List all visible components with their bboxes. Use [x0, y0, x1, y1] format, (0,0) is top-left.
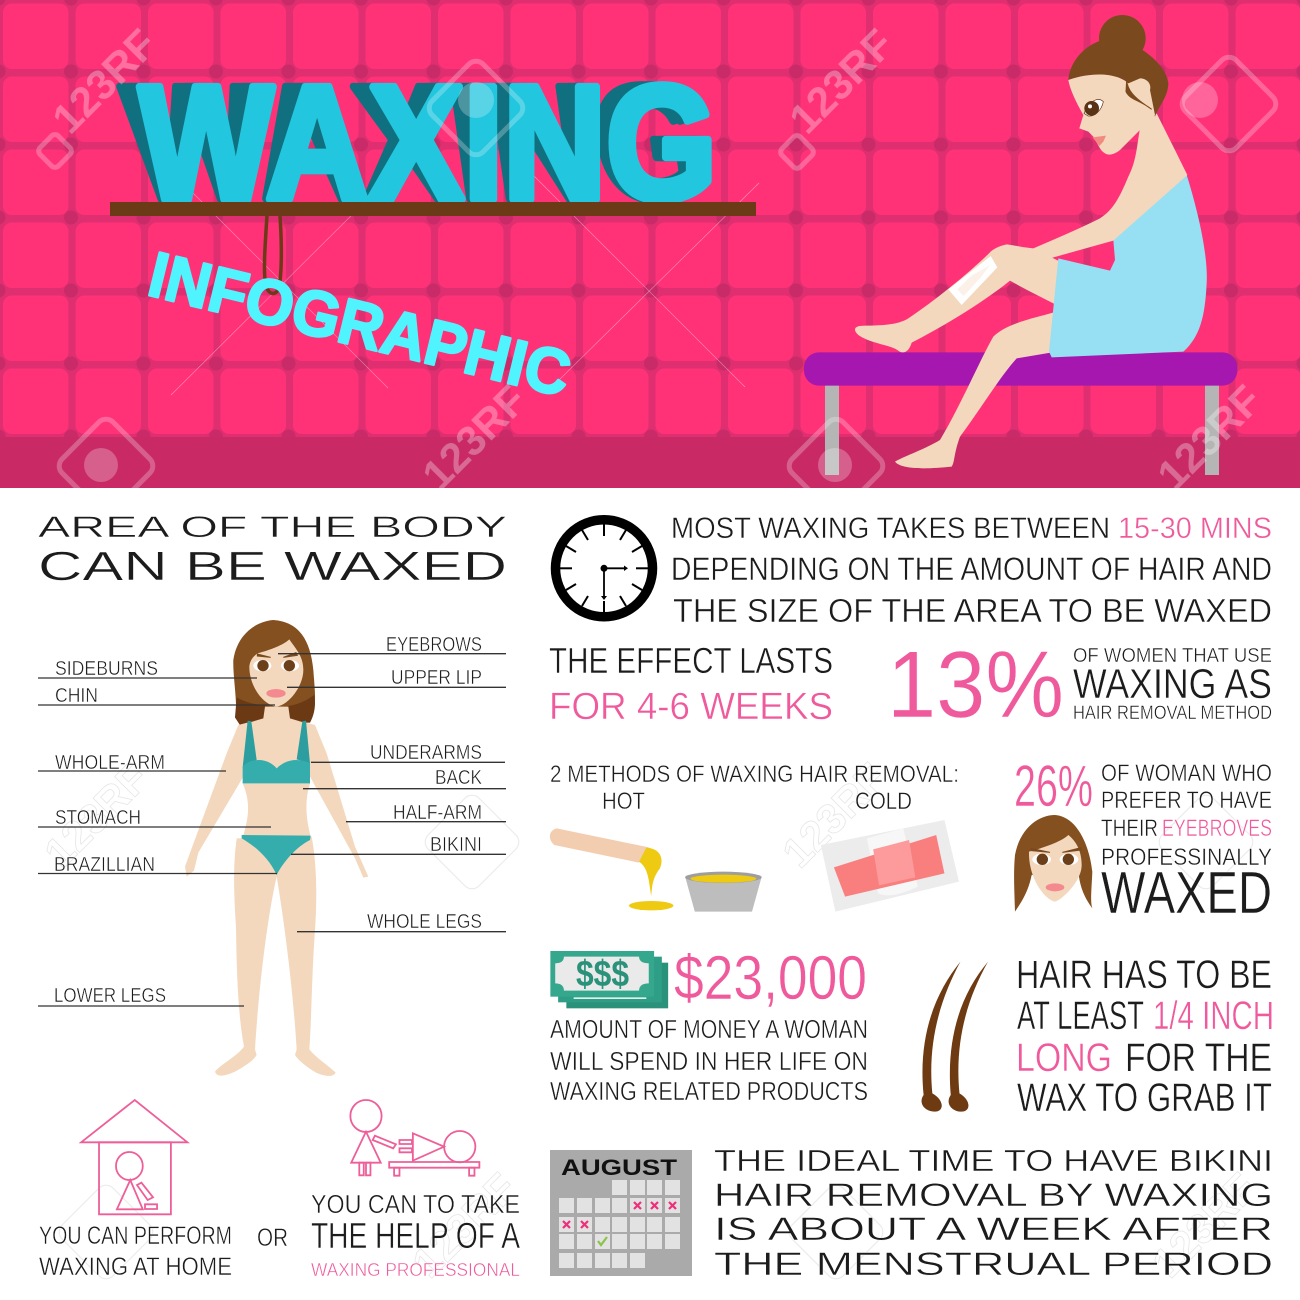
body part labels and leader lines: UPPER LIP	[391, 667, 482, 689]
body part labels and leader lines: EYEBROWS	[386, 634, 482, 656]
text: hair length	[1016, 953, 1274, 1120]
stock watermarks on hero: 123RF	[43, 20, 166, 142]
faint stock watermarks on white area: 123RF	[1143, 1164, 1266, 1286]
text: perform at home: YOU CAN PERFORM	[39, 1222, 232, 1250]
text: ideal time for bikini waxing: THE MENSTRUAL PERIOD	[714, 1246, 1273, 1282]
face	[249, 639, 303, 707]
stock watermarks on hero: 123RF	[780, 20, 903, 142]
towel	[1049, 175, 1207, 357]
subtitle: INFOGRAPHIC: INFOGRAPHIC	[142, 238, 578, 410]
text: two methods of waxing: 2 METHODS OF WAXING HAIR REMOVAL:	[550, 761, 959, 788]
stat: 26 percent eyebrows: OF WOMAN WHO	[1101, 760, 1272, 787]
text: take help of a professional: THE HELP OF A	[311, 1215, 520, 1256]
body part labels and leader lines: BACK	[435, 767, 483, 789]
text: take help of a professional: WAXING PROFESSIONAL	[311, 1260, 520, 1280]
text: duration of waxing: THE SIZE OF THE AREA TO BE WAXED	[673, 592, 1272, 629]
heading: area of the body	[38, 511, 507, 589]
stat: 13 percent	[887, 632, 1272, 738]
text: perform at home: WAXING AT HOME	[39, 1253, 232, 1281]
icon: August calendar	[550, 1150, 692, 1276]
arm, neck and shoulder	[1010, 113, 1187, 278]
lower leg resting on floor	[895, 312, 1057, 468]
icon: person waxing at home	[81, 1100, 187, 1214]
icon: waxing professional with client	[350, 1100, 479, 1176]
icon: cold wax strips	[821, 820, 959, 912]
bikini bottom	[242, 835, 311, 875]
body part labels and leader lines: WHOLE LEGS	[367, 911, 482, 933]
legs	[215, 837, 336, 1076]
text: two methods of waxing	[550, 761, 959, 815]
panel: pink tiled hero	[0, 0, 1300, 488]
raised leg with wax strip	[855, 244, 1063, 352]
stat: 26 percent eyebrows: PROFESSINALLY	[1101, 844, 1272, 871]
illustration: female body figure	[185, 620, 368, 1076]
body part labels and leader lines: WHOLE-ARM	[55, 752, 165, 774]
stock watermarks on hero	[37, 20, 1280, 517]
body part labels and leader lines: STOMACH	[55, 807, 141, 829]
icon: two hairs	[922, 962, 988, 1112]
faint stock watermarks on white area	[35, 754, 1266, 1286]
body part labels and leader lines: LOWER LEGS	[54, 985, 166, 1007]
text: or: OR	[257, 1224, 288, 1252]
bikini top	[243, 721, 310, 783]
icon: stack of dollar bills	[550, 951, 668, 1008]
stat: lifetime spending	[550, 944, 868, 1106]
stat: 26 percent eyebrows	[1014, 754, 1272, 926]
icon: clock	[556, 520, 652, 617]
text: effect lasts: FOR 4-6 WEEKS	[549, 686, 833, 728]
text: take help of a professional	[311, 1189, 520, 1280]
body part labels and leader lines: BRAZILLIAN	[54, 854, 155, 876]
stock watermarks on hero: 123RF	[413, 376, 536, 498]
lower hair shadow	[235, 695, 315, 725]
torso	[242, 707, 312, 840]
body part labels and leader lines: UNDERARMS	[370, 742, 482, 764]
icon: stack of dollar bills: $$$	[576, 953, 629, 994]
text: effect lasts	[549, 640, 833, 728]
text: effect lasts: THE EFFECT LASTS	[549, 640, 833, 681]
arms	[185, 723, 368, 878]
head with hair bun	[1068, 15, 1168, 155]
stat: lifetime spending: $23,000	[674, 944, 867, 1013]
bench	[804, 352, 1237, 475]
text: hair length: FOR THE	[1125, 1036, 1272, 1080]
stat: 26 percent eyebrows: THEIR	[1101, 815, 1158, 842]
icon: August calendar: AUGUST	[561, 1155, 678, 1180]
faint stock watermarks on white area: 123RF	[403, 1164, 526, 1286]
text: duration of waxing: 15-30 MINS	[1118, 512, 1272, 545]
text: duration of waxing	[671, 512, 1272, 629]
faint stock watermarks on white area: 123RF	[35, 754, 158, 876]
text: ideal time for bikini waxing: THE IDEAL TIME TO HAVE BIKINI	[714, 1143, 1273, 1178]
text: ideal time for bikini waxing: HAIR REMOVAL BY WAXING	[714, 1177, 1273, 1213]
illustration: woman waxing her leg on a bench	[804, 15, 1237, 475]
text: hair length: AT LEAST	[1017, 994, 1144, 1038]
text: two methods of waxing: COLD	[855, 788, 912, 815]
title: WAXING: WAXING	[139, 51, 717, 234]
body part labels and leader lines: BIKINI	[430, 834, 482, 856]
text: hair length: LONG	[1016, 1036, 1112, 1080]
stat: 13 percent: HAIR REMOVAL METHOD	[1073, 703, 1272, 724]
title: WAXING: WAXING	[115, 52, 718, 234]
stat: lifetime spending: WAXING RELATED PRODUCTS	[550, 1076, 868, 1106]
stat: 13 percent: 13%	[887, 632, 1064, 738]
shelf and hanging loop	[110, 202, 756, 293]
body part labels and leader lines: CHIN	[55, 685, 98, 707]
heading: area of the body: AREA OF THE BODY	[38, 511, 507, 544]
back hair	[233, 620, 315, 725]
stat: lifetime spending: AMOUNT OF MONEY A WOMAN	[550, 1014, 868, 1044]
text: ideal time for bikini waxing	[714, 1143, 1273, 1282]
stat: lifetime spending: WILL SPEND IN HER LIFE ON	[550, 1046, 868, 1076]
heading: area of the body: CAN BE WAXED	[38, 543, 507, 589]
text: two methods of waxing: HOT	[602, 788, 645, 815]
body part labels and leader lines	[38, 634, 506, 1007]
stat: 13 percent: OF WOMEN THAT USE	[1073, 645, 1272, 667]
text: take help of a professional: YOU CAN TO TAKE	[311, 1189, 520, 1219]
title: WAXING: WAXING	[127, 51, 717, 234]
body part labels and leader lines: HALF-ARM	[393, 802, 482, 824]
stat: 26 percent eyebrows: 26%	[1014, 754, 1093, 819]
icon: hot wax stick and bowl	[550, 828, 762, 912]
icon: face with shaped eyebrows	[1014, 815, 1092, 912]
stock watermarks on hero: 123RF	[1148, 376, 1271, 498]
text: ideal time for bikini waxing: IS ABOUT A WEEK AFTER	[714, 1211, 1273, 1247]
faint stock watermarks on white area: 123RF	[773, 754, 896, 876]
text: duration of waxing: MOST WAXING TAKES BETWEEN	[671, 512, 1110, 545]
body part labels and leader lines: SIDEBURNS	[55, 658, 158, 680]
text: perform at home	[39, 1222, 232, 1281]
